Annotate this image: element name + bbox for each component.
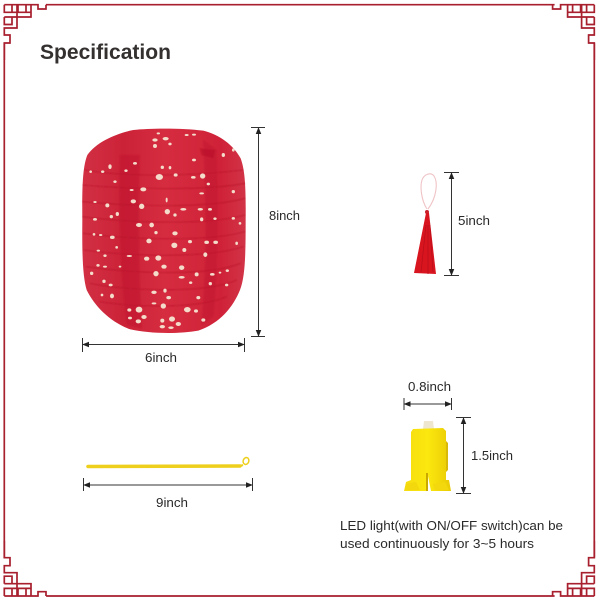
lantern handle stick xyxy=(88,457,250,466)
dimension: tassel height 5inch xyxy=(444,172,490,276)
LED usage note xyxy=(340,519,563,551)
LED usage note: LED light(with ON/OFF switch)can be xyxy=(340,519,563,533)
dimension: lantern height 8inch: 8inch xyxy=(269,209,300,223)
dimension: LED width 0.8inch: 0.8inch xyxy=(408,380,451,394)
lantern illustration xyxy=(82,129,246,333)
dimension: lantern width 6inch xyxy=(82,338,244,365)
lantern cut-out holes xyxy=(89,132,241,329)
lantern shading xyxy=(83,140,245,328)
dimension: LED width 0.8inch xyxy=(404,380,452,410)
dimension: LED height 1.5inch: 1.5inch xyxy=(471,449,513,463)
title: Specification xyxy=(40,41,171,64)
dimension: stick length 9inch xyxy=(84,478,252,510)
tassel illustration xyxy=(414,174,436,274)
dimension: lantern width 6inch: 6inch xyxy=(145,351,177,365)
dimension: tassel height 5inch: 5inch xyxy=(458,214,490,228)
dimension: lantern height 8inch xyxy=(251,128,300,336)
LED light illustration xyxy=(404,421,451,491)
dimension: stick length 9inch: 9inch xyxy=(156,496,188,510)
LED usage note: used continuously for 3~5 hours xyxy=(340,537,534,551)
dimension: LED height 1.5inch xyxy=(456,418,513,494)
